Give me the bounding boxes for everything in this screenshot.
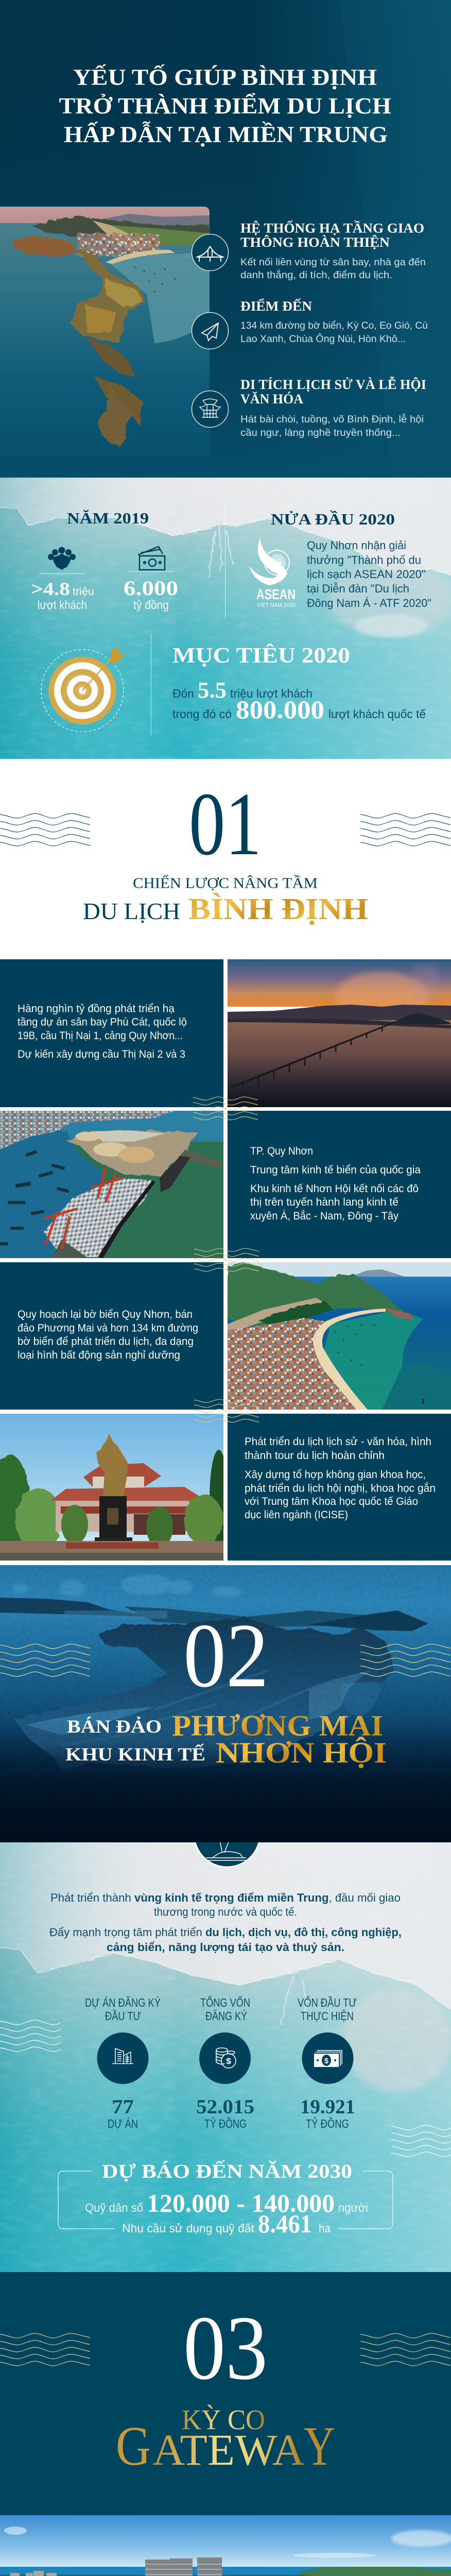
photo: port [0,1111,223,1258]
text block: 2020 target [172,643,426,724]
forecast box: Nhu cầu sử dụng quỹ đất [122,2222,255,2235]
panel: science tourism text: phát triển du lịch hội nghị, khoa học gắn [245,1483,436,1494]
panel: science tourism text: thành tour du lịch hoàn chỉnh [245,1450,385,1462]
column: 2019: 6.000 [124,577,178,600]
icon: target [41,647,126,732]
icon: bridge [192,234,229,271]
stat: registered capital: ĐĂNG KÝ [205,2009,247,2023]
waves: grid junction 1 [193,1097,258,1120]
forecast box: DỰ BÁO ĐẾN NĂM 2030 [102,2160,352,2182]
heading 03: ATEWA [152,2425,305,2475]
panel: science tourism text: Phát triển du lịch lịch sử - văn hóa, hình [245,1436,431,1448]
waves: grid junction 3 [194,1399,259,1422]
stat: implemented capital: VỐN ĐẦU TƯ [298,1995,357,2009]
text block: heritage [240,377,426,438]
column: 2019 [31,509,178,612]
text block: 2020 target: 5.5 [198,677,227,703]
waves right [360,2333,450,2366]
text block: economic role: thương trong nước và quốc tế. [154,1905,297,1919]
forecast box: Quỹ dân số [85,2201,143,2214]
text block: economic role: Đẩy mạnh trọng tâm phát triển du lịch, dịch vụ, đô thị, công nghiệp, [49,1926,402,1939]
panel: coast planning text: đảo Phương Mai và hơn 134 km đường [18,1322,198,1334]
text block: heritage: Hát bài chòi, tuồng, võ Bình Định, lễ hội [240,413,424,425]
panel: infrastructure text: tầng dự án sân bay Phù Cát, quốc lộ [18,1016,187,1028]
forecast box: 120.000 - 140.000 [147,2189,335,2217]
panel: Quy Nhon text: thị trên tuyến hành lang kinh tế [250,1196,398,1208]
panel: infrastructure text: Hàng nghìn tỷ đồng phát triển hạ [18,1003,175,1015]
panel: science tourism text: dục liên ngành (ICISE) [245,1509,348,1521]
text block: 2020 target: 800.000 [236,695,324,724]
number 01: 01 [189,774,262,874]
text block: destinations: Lao Xanh, Chùa Ông Núi, Hòn Khô... [240,333,406,345]
heading 02 [65,1709,387,1769]
column: first half 2020: Đông Nam Á - ATF 2020" [307,597,431,609]
text block: transport: HỆ THỐNG HẠ TẦNG GIAO [240,221,424,236]
number 02: 02 [183,1604,269,1706]
icon: cash: $ [324,2057,329,2065]
text block: transport: THÔNG HOÀN THIỆN [240,235,390,250]
heading 02: KHU KINH TẾ [65,1744,205,1765]
column: 2019: >4.8 [31,579,70,599]
text block: economic role: Phát triển thành vùng kinh tế trọng điểm miền Trung, đầu mối giao [50,1891,401,1904]
column: first half 2020: thưởng "Thành phố du [307,553,421,567]
icon: pagoda [192,391,229,428]
panel: coast planning text: loại hình bất động sản nghỉ dưỡng [18,1349,180,1361]
waves right [360,1644,450,1676]
panel: sea economy stats [0,1842,451,2272]
column: 2019: lượt khách [38,598,87,612]
heading 01: DU LỊCH [83,898,180,924]
heading 01: BÌNH ĐỊNH [188,892,368,926]
heading 02: NHƠN HỘI [216,1737,387,1769]
text block: transport [240,221,426,281]
logo: ASEAN: ASEAN [256,586,296,602]
column: 2019: tỷ đồng [133,598,169,612]
column: 2019: NĂM 2019 [67,509,149,527]
text block: destinations: 134 km đường bờ biển, Kỳ Co, Eo Gió, Cù [240,320,428,331]
photo: aerial peninsula [0,207,210,455]
icon: money [138,547,165,570]
stat: registered projects [85,1996,161,2130]
title: YẾU TỐ GIÚP BÌNH ĐỊNH [73,64,377,90]
circle icon: palm [194,1801,260,1867]
text block: heritage: DI TÍCH LỊCH SỬ VÀ LỄ HỘI [240,377,426,392]
waves left [0,1644,90,1676]
panel: sea statistics [0,478,451,759]
column: first half 2020: Quy Nhơn nhận giải [307,539,406,552]
text block: 2020 target: MỤC TIÊU 2020 [172,643,350,668]
panel: coast planning text: bờ biển để phát triển du lịch, đa dạng [18,1335,194,1348]
column: 2019: triệu [73,586,94,598]
text block: transport: Kết nối liền vùng từ sân bay, nhà ga đến [240,257,426,268]
text block: destinations: ĐIỂM ĐẾN [240,299,312,314]
panel: science tourism text [228,1414,451,1561]
waves: grid junction 2 [194,1248,259,1272]
forecast box [58,2160,393,2238]
stat: implemented capital: 19.921 [300,2096,355,2118]
heading 03: G [116,2416,151,2477]
waves left [0,814,90,846]
panel: Quy Nhon text: TP. Quy Nhơn [250,1145,313,1157]
stat: registered projects: DỰ ÁN ĐĂNG KÝ [85,1996,161,2009]
photo: sunset bridge [228,959,451,1107]
photo: masterplan aerial [0,2515,451,2576]
text block: 2020 target: triệu lượt khách [230,687,313,700]
text block: 2020 target: lượt khách quốc tế [328,707,426,721]
heading 01: CHIẾN LƯỢC NÂNG TẦM [133,874,318,891]
icon: people [48,547,76,570]
text block: destinations [240,299,428,345]
number 03: 03 [183,2297,268,2399]
logo: ASEAN [249,538,296,608]
forecast box: ha [319,2222,331,2235]
heading 02: PHƯƠNG MAI [172,1709,383,1742]
photo: beach village [228,1262,451,1410]
waves left [0,2020,60,2052]
divider [225,501,226,618]
stat: registered capital [196,1995,254,2130]
text block: economic role: cảng biển, năng lượng tái tạo và thuỷ sản. [107,1941,344,1954]
stat: registered capital: TỶ ĐỒNG [204,2116,247,2130]
column: first half 2020: tại Diễn đàn "Du lịch [307,582,409,595]
icon: coins: $ [226,2057,231,2066]
heading 03 [116,2404,335,2477]
column: first half 2020 [249,510,431,609]
forecast box: người [338,2201,368,2214]
panel: science tourism text: với Trung tâm Khoa học quốc tế Giáo [245,1496,418,1507]
text block: heritage: VĂN HÓA [240,392,303,406]
text block: transport: danh thắng, di tích, điểm du lịch. [240,269,392,281]
heading 03: Y [304,2416,335,2477]
stat: implemented capital [298,1995,357,2130]
stat: implemented capital: TỶ ĐỒNG [306,2116,349,2130]
icon: paper plane [192,312,229,349]
column: first half 2020: NỬA ĐẦU 2020 [271,510,395,528]
text block: heritage: cầu ngư, làng nghề truyền thống... [240,427,401,438]
photo: statue and museum [0,1414,223,1561]
text block: 2020 target: trong đó có [172,707,232,721]
title [59,64,391,147]
panel: Quy Nhon text: xuyên Á, Bắc - Nam, Đông - Tây [250,1210,398,1222]
heading 01 [83,874,368,926]
panel: section 02 peninsula [0,1565,451,1842]
icon: buildings [112,2048,133,2064]
panel: section 01 header [0,759,451,959]
waves left [0,2333,90,2366]
panel: Quy Nhon text [228,1111,451,1258]
icon: cash [314,2050,342,2067]
title: HẤP DẪN TẠI MIỀN TRUNG [64,122,388,147]
stat: registered projects: 77 [112,2096,134,2118]
panel: infrastructure text: 19B, cầu Thị Nại 1, cảng Quy Nhơn... [18,1030,183,1042]
icon: coins [216,2048,236,2068]
panel: section 03 header [0,2272,451,2515]
panel: Quy Nhon text: Trung tâm kinh tế biển của quốc gia [250,1164,421,1176]
panel: infrastructure text: Dự kiến xây dựng cầu Thị Nại 2 và 3 [18,1048,185,1060]
logo: ASEAN: VIET NAM 2020 [257,602,296,608]
stat: registered capital: 52.015 [196,2096,254,2118]
stat: registered capital: TỔNG VỐN [200,1995,250,2009]
stat: implemented capital: THỰC HIỆN [301,2009,354,2023]
heading 03: KỲ CO [182,2404,265,2435]
panel: hero background [0,0,451,478]
panel: coast planning text [0,1262,223,1410]
forecast box: 8.461 [258,2209,312,2238]
panel: Quy Nhon text: Khu kinh tế Nhơn Hội kết nối các đô [250,1183,419,1195]
panel: coast planning text: Quy hoạch lại bờ biển Quy Nhơn, bán [18,1309,193,1320]
waves right [391,2125,451,2157]
text block: 2020 target: Đón [172,687,194,700]
text block: economic role [49,1891,402,1954]
panel: infrastructure text [0,959,223,1107]
heading 02: BÁN ĐẢO [67,1716,162,1737]
stat: registered projects: ĐẦU TƯ [105,2009,141,2023]
stat: registered projects: DỰ ÁN [108,2117,138,2130]
panel: science tourism text: Xây dựng tổ hợp không gian khoa học, [245,1469,426,1481]
column: first half 2020: lịch sạch ASEAN 2020" [307,568,426,581]
waves right [360,814,450,846]
title: TRỞ THÀNH ĐIỂM DU LỊCH [59,92,391,118]
